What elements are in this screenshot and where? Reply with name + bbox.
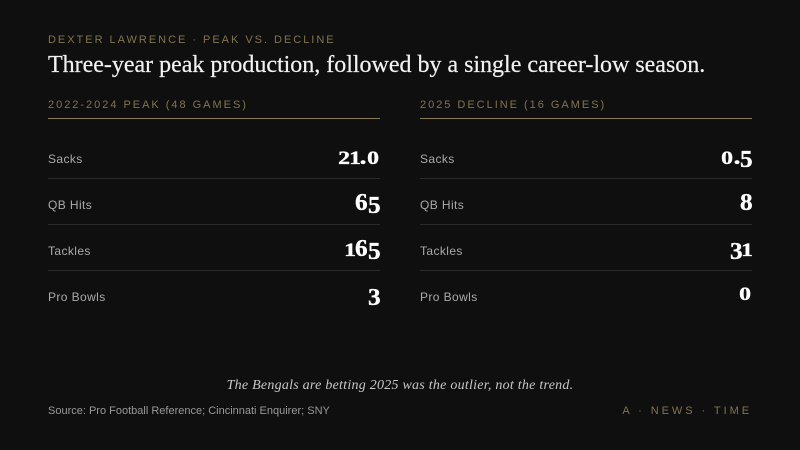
value: tackles 165: 6: [355, 236, 368, 262]
value: sacks 0.5: 5: [739, 147, 752, 173]
source: Source: Pro Football Reference; Cincinnati Enquirer; SNY: [48, 405, 330, 417]
row label: tackles: Tackles: [48, 244, 91, 258]
value: tackles 31: [729, 239, 753, 265]
value: tackles 31: 3: [729, 239, 742, 265]
panel: 2025 decline: [420, 99, 753, 305]
row label: pro bowls: Pro Bowls: [420, 290, 478, 304]
value: sacks 21.0: 0: [367, 148, 379, 169]
value: tackles 165: 1: [344, 240, 356, 261]
value: QB hits 65: 6: [355, 190, 368, 216]
value: sacks 21.0: 1: [349, 148, 361, 169]
value: sacks 21.0: .: [360, 144, 366, 169]
row label: sacks: Sacks: [420, 152, 455, 166]
value: sacks 21.0: 2: [338, 148, 350, 169]
row label: sacks: Sacks: [48, 152, 83, 166]
title: Three-year peak production, followed by a single career-low season.: [48, 52, 705, 78]
panel heading: peak: 2022-2024 PEAK (48 GAMES): [48, 99, 248, 111]
value: QB hits 65: [355, 190, 380, 219]
row label: QB hits: QB Hits: [420, 198, 464, 212]
row label: pro bowls: Pro Bowls: [48, 290, 106, 304]
value: sacks 21.0: [338, 144, 379, 169]
row label: QB hits: QB Hits: [48, 198, 92, 212]
row label: tackles: Tackles: [420, 244, 463, 258]
value: sacks 0.5: [721, 144, 752, 173]
value: QB hits 65: 5: [367, 193, 380, 219]
value: tackles 31: 1: [741, 240, 753, 261]
value: sacks 0.5: .: [733, 144, 740, 169]
value: pro bowls 3: 3: [367, 285, 380, 311]
value: pro bowls 0: 0: [739, 284, 751, 305]
value: tackles 165: 5: [367, 239, 380, 265]
brand mark: A · NEWS · TIME: [622, 405, 752, 417]
takeaway line: The Bengals are betting 2025 was the outlier, not the trend.: [227, 378, 573, 393]
value: sacks 0.5: 0: [721, 148, 732, 169]
value: tackles 165: [344, 236, 380, 265]
panel: 2022-2024 peak: [48, 99, 380, 311]
eyebrow: DEXTER LAWRENCE · PEAK VS. DECLINE: [48, 34, 336, 46]
panel heading: decline: 2025 DECLINE (16 GAMES): [420, 99, 606, 111]
value: QB hits 8: 8: [739, 190, 752, 216]
